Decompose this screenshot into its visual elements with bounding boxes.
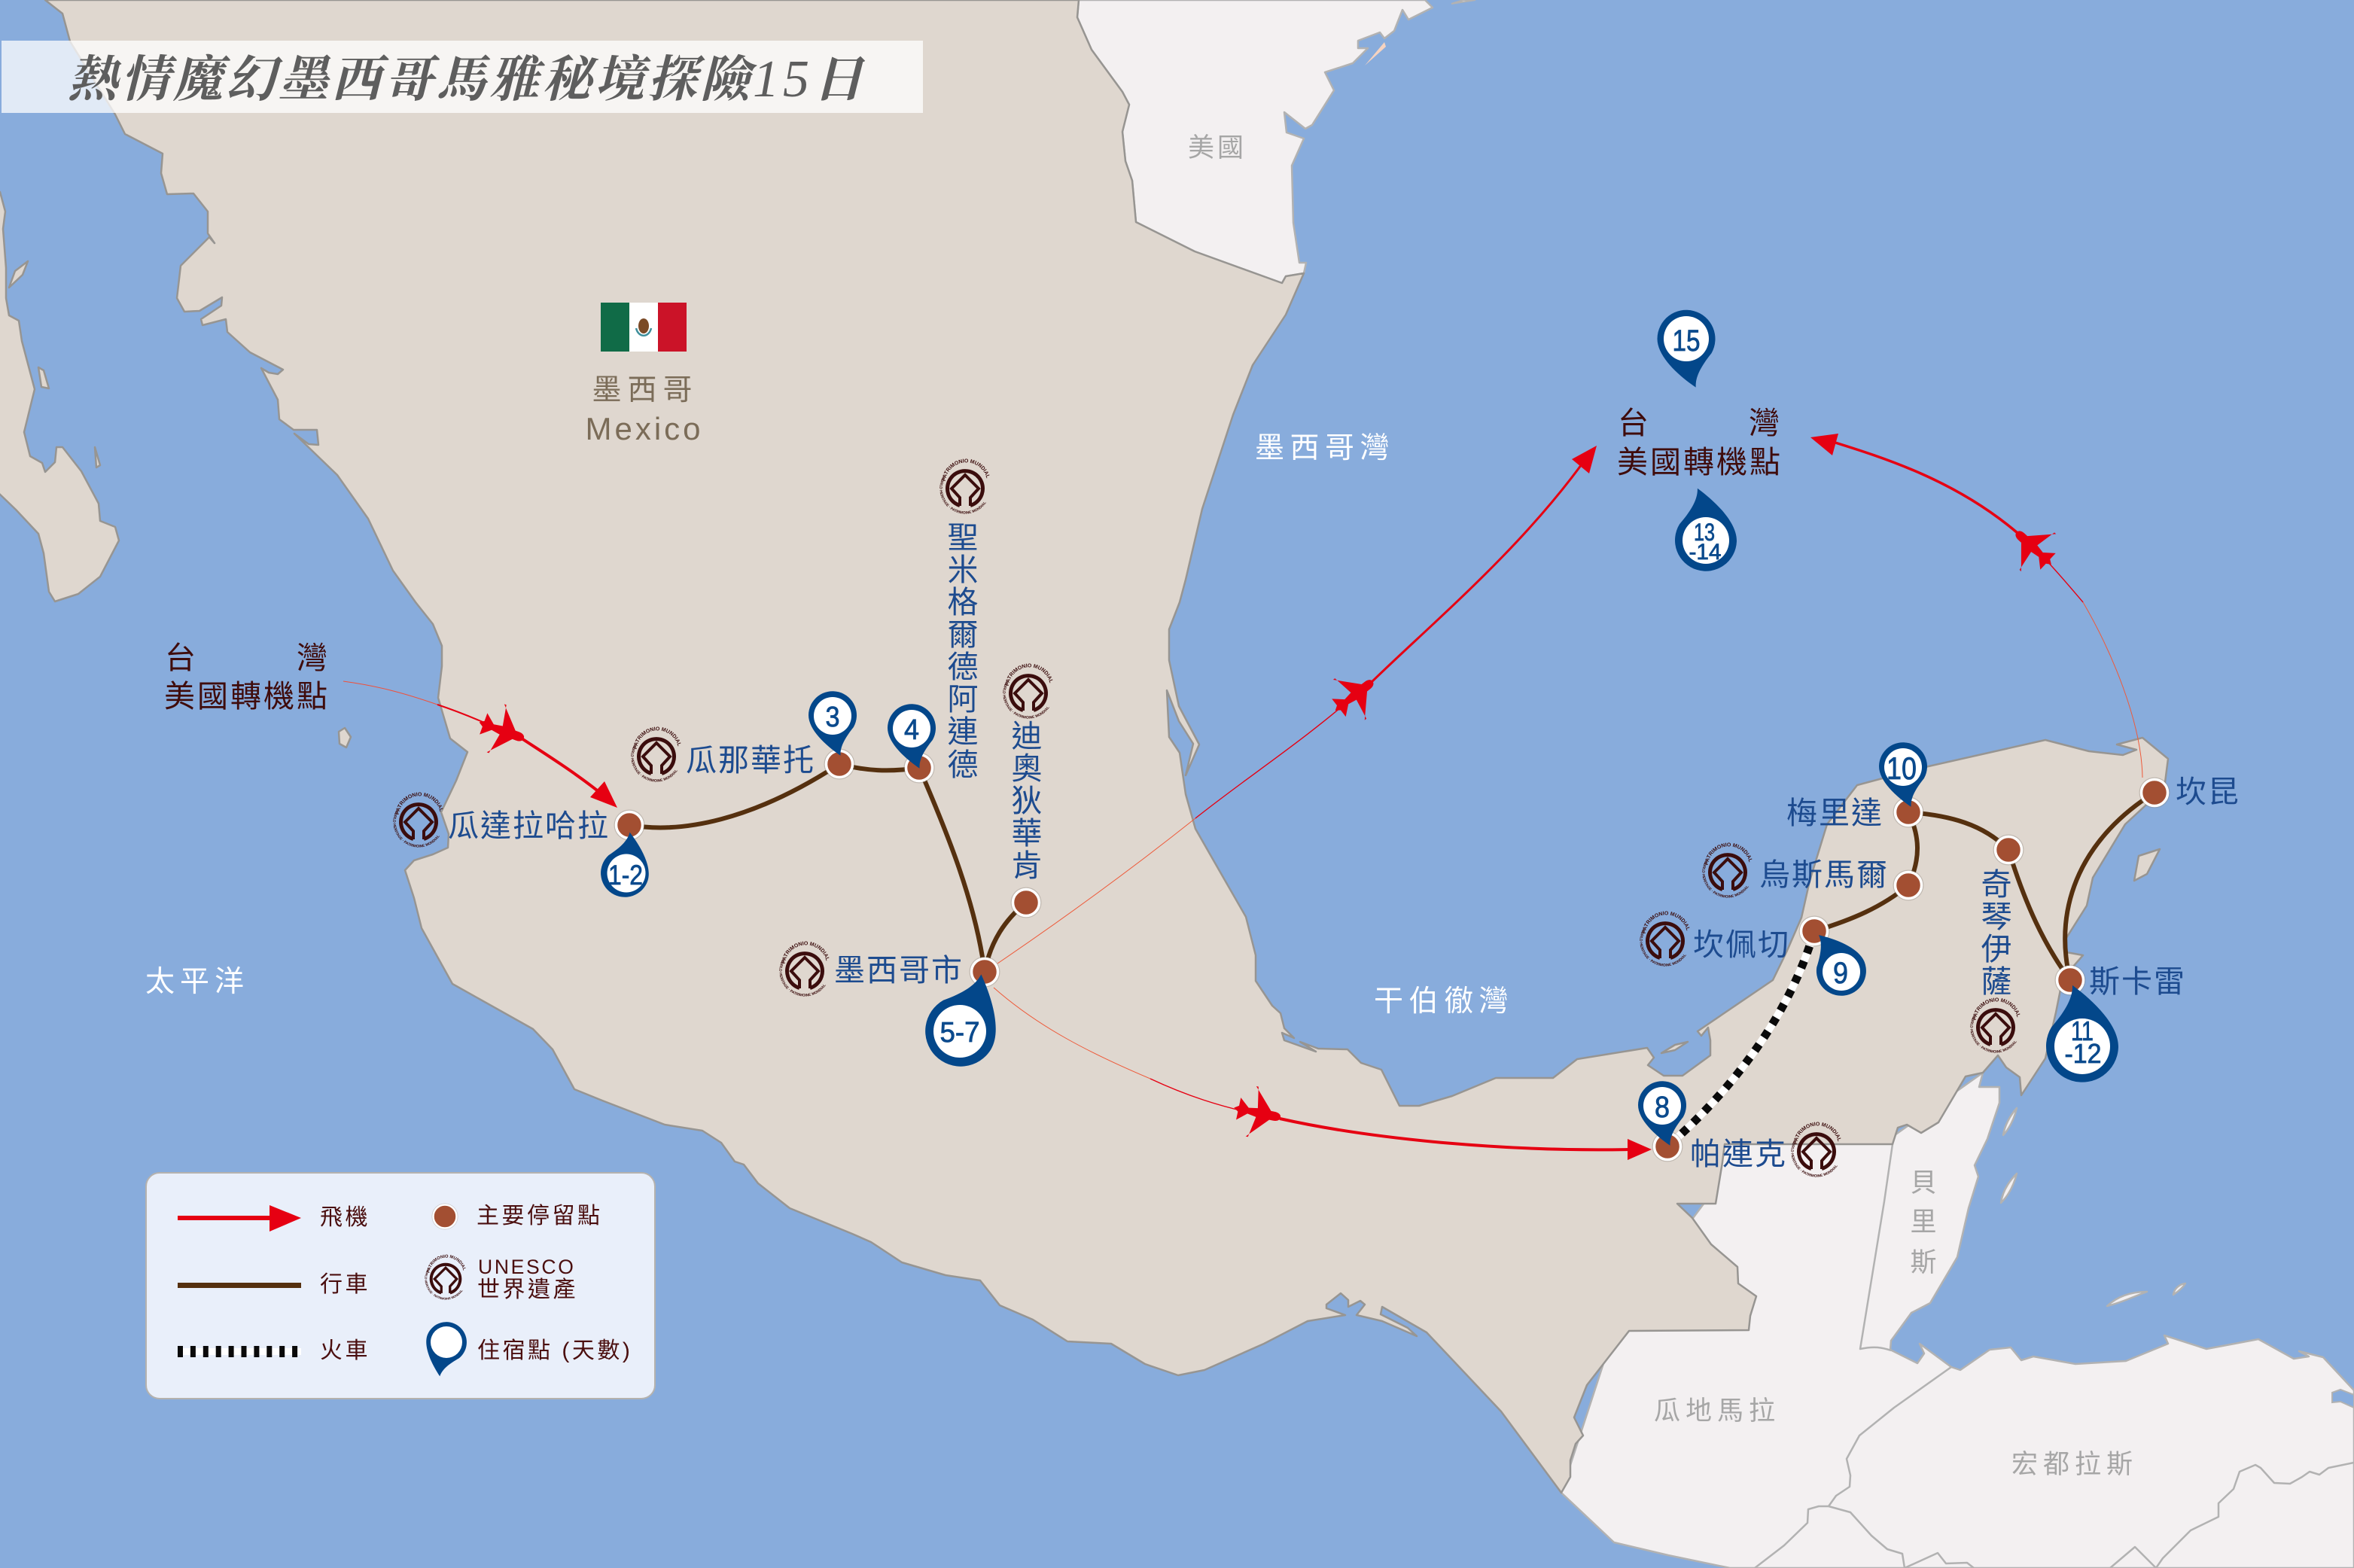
city label: Campeche: 坎佩切	[1693, 927, 1790, 962]
legend: flight text: 飛機	[320, 1205, 370, 1230]
lodging pin: days 1-2: 1-2	[608, 860, 643, 891]
lodging pin: days 5-7	[912, 962, 1022, 1079]
Mexican flag	[601, 303, 687, 352]
lodging pin: day 8: 8	[1655, 1091, 1670, 1124]
legend: train line	[178, 1348, 301, 1355]
country label: Mexico	[585, 374, 704, 446]
UNESCO icon: Mexico City	[778, 941, 830, 998]
flight: Mexico City to US transit	[997, 446, 1597, 964]
lodging pin: day 4	[888, 704, 936, 769]
transit label: right	[1617, 406, 1783, 480]
lodging pin: days 11-12: -12	[2064, 1038, 2102, 1069]
transit label: left: 台	[165, 641, 196, 675]
lodging pin: days 1-2	[595, 827, 660, 903]
city label: Guadalajara: 瓜達拉哈拉	[448, 808, 610, 843]
UNESCO icon: Teotihuacan	[1001, 663, 1054, 720]
country label: Belize: 貝里斯	[1910, 1168, 1937, 1277]
city label: San Miguel de Allende: 聖米格爾德阿連德	[947, 520, 980, 782]
city label: Uxmal: 烏斯馬爾	[1759, 857, 1889, 892]
legend: flight arrow	[178, 1205, 301, 1232]
lodging pin: days 13-14: 13	[1694, 519, 1715, 546]
city label: Teotihuacan: 迪奧狄華肯	[1012, 719, 1043, 883]
UNESCO icon: Campeche	[1638, 911, 1691, 968]
sea label: Pacific Ocean: 太平洋	[145, 966, 249, 998]
city label: Guanajuato: 瓜那華托	[686, 743, 815, 778]
legend: stop text: 主要停留點	[477, 1204, 602, 1229]
city label: Xcaret: 斯卡雷	[2089, 964, 2186, 999]
lodging pin: days 11-12: 11	[2071, 1015, 2094, 1046]
lodging pin: day 8	[1638, 1081, 1686, 1146]
UNESCO icon: San Miguel de Allende	[938, 458, 991, 516]
lodging pin: days 13-14: -14	[1689, 540, 1721, 565]
USA coast fragment at top	[1451, 0, 1475, 4]
lodging pin: days 13-14	[1674, 488, 1738, 572]
legend: stop marker	[432, 1203, 458, 1230]
flight: Mexico City to Palenque	[994, 988, 1652, 1160]
transit label: left: 灣	[297, 641, 327, 675]
transit label: left: 美國轉機點	[164, 679, 330, 714]
lodging pin: day 9: 9	[1833, 957, 1848, 990]
stop markers	[614, 748, 2170, 1162]
lodging pin: day 15: 15	[1673, 324, 1700, 358]
sea label: Gulf of Mexico: 墨西哥灣	[1255, 432, 1395, 464]
title banner: 熱情魔幻墨西哥馬雅秘境探險15日	[68, 50, 866, 108]
legend: train text: 火車	[320, 1338, 370, 1363]
neighbouring countries: Guatemala, Belize, Honduras	[1561, 1073, 2354, 1568]
UNESCO icon: Palenque	[1789, 1122, 1842, 1179]
legend: UNESCO icon	[424, 1255, 467, 1301]
lodging pin: day 3	[809, 691, 857, 756]
country label: USA: 美國	[1188, 133, 1247, 163]
title banner	[2, 41, 923, 113]
Honduras lake	[2332, 1390, 2354, 1408]
legend: UNESCO text: UNESCO	[478, 1256, 576, 1278]
city label: Palenque: 帕連克	[1690, 1137, 1787, 1171]
legend: UNESCO text	[477, 1256, 578, 1302]
city label: Chichen Itza: 奇琴伊薩	[1981, 867, 2013, 999]
transit label: right: 灣	[1749, 406, 1780, 440]
legend: lodging pin	[415, 1316, 473, 1381]
country label: Honduras: 宏都拉斯	[2011, 1450, 2138, 1479]
legend: lodging text: 住宿點 (天數)	[477, 1338, 632, 1363]
lodging pin: day 10	[1879, 742, 1927, 807]
country label: Mexico: Mexico	[585, 411, 704, 446]
lodging pin: days 11-12	[2045, 985, 2121, 1083]
UNESCO icon: Guanajuato	[629, 726, 682, 784]
lodging pin: day 10: 10	[1887, 751, 1917, 786]
country label: Guatemala: 瓜地馬拉	[1654, 1396, 1780, 1426]
USA lake sliver	[1120, 132, 1125, 161]
lodging pin: day 9	[1803, 923, 1874, 1003]
flight: Taiwan to Guadalajara	[343, 681, 617, 808]
city label: Cancun: 坎昆	[2176, 775, 2240, 809]
legend panel	[146, 1173, 655, 1399]
transit label: right: 美國轉機點	[1617, 445, 1783, 480]
Baja California and islands	[0, 192, 2160, 1053]
legend: drive line	[178, 1283, 301, 1288]
legend: UNESCO text: 世界遺產	[477, 1277, 578, 1302]
lodging pin: day 3: 3	[825, 702, 840, 733]
country label: Mexico: 墨西哥	[592, 374, 699, 406]
USA barrier island	[1365, 42, 1386, 65]
sea label: Bay of Campeche: 干伯徹灣	[1374, 985, 1514, 1018]
transit label: left	[164, 641, 330, 714]
flight: Cancun to US transit	[1810, 434, 2142, 778]
lodging pin: days 5-7: 5-7	[939, 1017, 980, 1049]
UNESCO icon: Guadalajara	[391, 792, 444, 849]
lodging pin: day 4: 4	[904, 714, 919, 746]
driving routes	[629, 764, 2155, 980]
city label: Merida: 梅里達	[1786, 796, 1884, 830]
UNESCO icon: Chichen Itza	[1969, 997, 2021, 1055]
border lines	[1755, 1144, 2354, 1568]
city label: Mexico City: 墨西哥市	[834, 953, 964, 988]
UNESCO icon: Uxmal	[1701, 842, 1753, 900]
train route	[1667, 931, 1814, 1146]
lodging pin: day 15	[1658, 310, 1715, 388]
USA land	[1077, 0, 1433, 283]
transit label: right: 台	[1618, 406, 1649, 440]
legend: drive text: 行車	[320, 1272, 370, 1297]
